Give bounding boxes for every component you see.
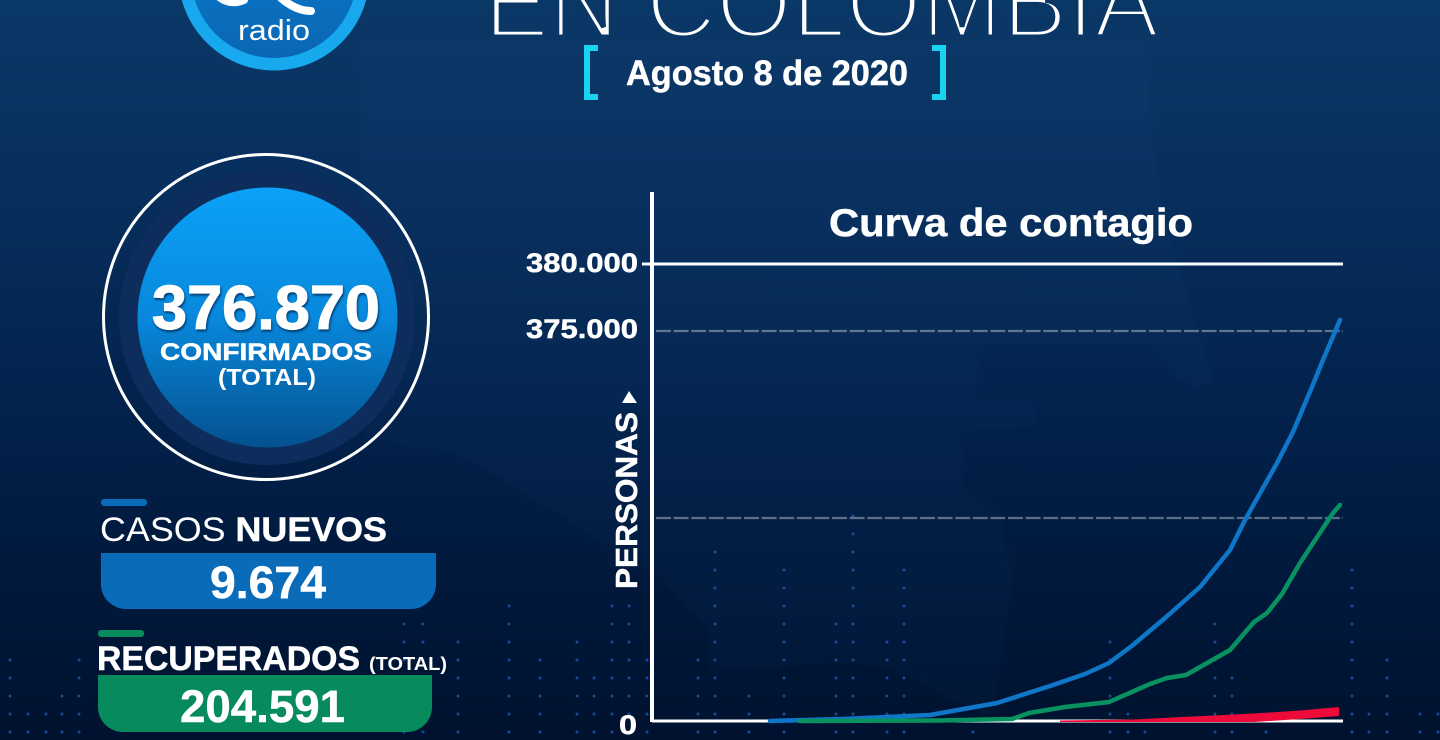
chart: curva de contagio: 375.000 [526,314,638,344]
blue curve: confirmed [770,320,1340,721]
red curve: deaths [1060,707,1339,722]
new cases value: 9.674 [210,557,326,608]
new cases bar [101,553,436,609]
chart title: Curva de contagio [829,202,1193,245]
total label: CONFIRMADOS [160,339,372,366]
y axis title: PERSONAS [609,412,644,589]
panel: recovered [97,630,447,732]
left bracket [587,48,598,97]
logo wordmark: radio [238,15,310,47]
recovered sublabel: (TOTAL) [369,654,447,674]
logo mark [218,0,311,11]
green curve: recovered [800,505,1340,721]
recovered value: 204.591 [180,681,345,732]
y labels: 380.000 [526,248,638,278]
date text: Agosto 8 de 2020 [626,54,908,93]
recovered label: RECUPERADOS [97,640,360,678]
total sublabel: (TOTAL) [218,364,316,390]
new cases label: CASOS NUEVOS [100,511,387,549]
y axis arrow [622,391,637,403]
logo: radio station [178,0,370,70]
total number: 376.870 [152,274,380,343]
date heading [587,48,943,97]
dot pattern [10,516,1438,740]
panel: total confirmed [104,154,428,480]
chart: curva de contagio [526,192,1343,740]
recovered bar [98,675,432,732]
panel: new cases [100,499,436,609]
chart: curva de contagio: 0 [619,710,637,740]
map silhouette [360,40,1214,716]
right bracket [932,48,943,97]
